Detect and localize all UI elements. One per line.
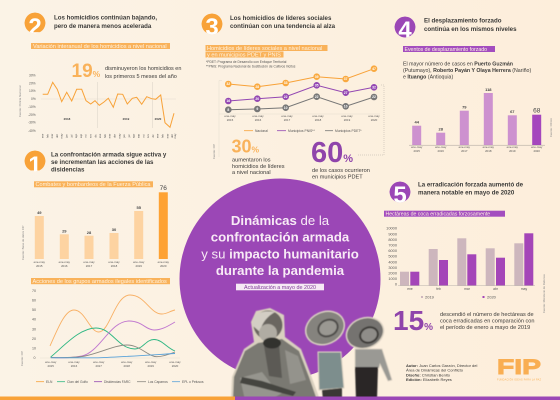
line chart: armed groups: 2020 [172,364,179,368]
line chart: social leaders: ene-may [312,114,324,118]
panel: section 2 homicides [18,12,181,139]
callout: 19 percent: los primeros 5 meses del año [105,74,177,80]
callout: 60 percent: de los casos ocurrieron [312,168,370,174]
panel: section 3 social leaders [202,14,384,180]
line chart: interannual variation: Fuente: Policía Nacional [18,85,22,117]
heading label: combats: Combates y bombardeos de la Fuerza Pública [36,182,151,188]
heading label: interannual variation: Variación interanual de los homicidios a nivel nacional [33,44,167,50]
bar chart: displacement: Fuente: OCHA [549,118,553,137]
line chart: social leaders: 16 [226,99,230,103]
line chart: armed groups: 10 [32,346,36,350]
line chart: social leaders: 47 [372,67,376,71]
icon: number 1 [24,150,46,172]
text: credits: Edición: Elizabeth Reyes [406,377,452,382]
line chart: interannual variation: feb [160,134,164,138]
bar chart: hectares: 4000 [388,259,398,264]
bar chart: combats: ene-may [34,260,45,264]
line chart: armed groups: ene-may [169,360,181,364]
line chart: interannual variation: abr [55,134,59,138]
heading: section 4: continúa en los mismos niveles [424,26,517,33]
bar chart: displacement [409,87,553,153]
line chart: interannual variation: 2019 [123,117,130,121]
callout: 60 percent: en municipios PDET [312,174,363,180]
text: footnotes: **PNIS: Programa Nacional de Sustitución de Cultivos Ilícitos [206,64,296,68]
line chart: interannual variation: -10% [28,105,36,109]
line chart: interannual variation: may [61,133,64,138]
bar chart: hectares: Fuente: Ministerio de Defensa [542,274,546,313]
line chart: interannual variation: oct [84,134,88,138]
logo: FIP: FUNDACIÓN IDEAS PARA LA PAZ [497,378,542,382]
heading: section 2: Los homicidios continúan bajando, [54,14,157,22]
line chart: interannual variation: jun [122,134,126,139]
bar chart: combats: 76 [160,185,167,192]
heading label: displacement events: Eventos de desplazamiento forzado [404,47,487,53]
illustration: second person carrying rolled mattress [342,312,392,400]
bar chart: hectares: 6000 [388,248,398,253]
callout: 60 percent: 60% [311,137,353,169]
bar chart: combats: ene-may [83,260,95,264]
line chart: interannual variation: may [174,133,177,138]
line chart: interannual variation: 10% [29,89,36,93]
callout: 19 percent: 19% [72,61,101,82]
bar chart: hectares: 5000 [388,254,398,259]
callout: 30 percent: 30% [232,137,260,157]
bar chart: displacement: 44 [414,120,420,124]
line chart: social leaders: ene-may [224,114,236,118]
bar chart: displacement: 2016 [437,149,444,153]
bar chart: combats: 2017 [86,264,93,268]
icon: number 5 [390,182,410,202]
bar chart: displacement: 2019 [509,149,516,153]
line chart: armed groups: 30 [32,327,36,331]
bar chart: combats: 30 [112,227,117,232]
line chart: social leaders: 22 [372,95,376,99]
line chart: interannual variation: ene [157,133,160,138]
line chart: interannual variation: feb [45,134,49,138]
line chart: social leaders: 28 [255,85,259,89]
line chart: interannual variation: 20% [29,81,36,85]
bar chart: hectares: may [521,287,527,291]
line chart: social leaders: ene-may [341,114,353,118]
line chart: interannual variation: abr [112,134,116,138]
bar chart: displacement: ene-may [411,145,423,149]
subtitle: update date [236,284,324,291]
bar chart: hectares: 2020 [487,294,497,299]
line chart: interannual variation: dic [93,134,97,138]
bar chart: combats: 29 [62,228,67,234]
icon: number 4 [394,16,416,38]
line chart: social leaders: 2018 [315,118,322,122]
line chart: armed groups: ene-may [68,360,80,364]
callout: 19 percent [72,61,181,82]
line chart: armed groups: 20 [32,337,36,341]
bar chart: hectares: 9000 [388,231,398,236]
bar chart: displacement: 67 [510,109,515,114]
bar chart: displacement: ene-may [531,145,543,149]
line chart: interannual variation: jul [127,134,131,138]
callout: 15 percent: coca erradicadas en comparación con [440,318,535,324]
line chart: social leaders: 2015 [227,118,234,122]
heading label: armed groups: Acciones de los grupos armados ilegales identificados [32,279,167,285]
line chart: social leaders: ene-may [252,114,264,118]
line chart: social leaders: 32 [226,82,230,86]
line chart: interannual variation: nov [90,133,92,138]
line chart: interannual variation: mar [108,134,112,138]
line chart: social leaders: 22 [284,95,288,99]
line chart: interannual variation: oct [141,134,145,138]
line chart: social leaders: ene-may [368,114,380,118]
line chart: armed groups: 40 [32,318,36,322]
line chart: armed groups: Fuente: FIP [20,351,24,366]
title: durante la pandemia [216,263,345,278]
illustration: person carrying rolled mattress [300,305,350,400]
line chart: social leaders: 27 [344,91,348,95]
bar chart: combats: 49 [37,210,42,215]
icon: number 5: 5 [393,182,407,209]
line chart: armed groups: 2018 [123,364,130,368]
line chart: social leaders: 22 [315,95,319,99]
bar chart: combats: 55 [136,205,142,210]
line chart: interannual variation: mar [50,134,54,138]
text: credits: Diseño: Christian Benito [406,372,450,377]
bar chart: hectares: 7000 [388,242,398,248]
heading label: social leaders: y en municipios PDET y PNIS [207,52,281,58]
bar chart: displacement: 68 [533,108,541,114]
heading label: hectares: Hectáreas de coca erradicadas forzosamente [386,212,490,218]
heading: section 1: disidencias [51,166,85,174]
line chart: armed groups: ene-may [145,360,157,364]
line chart: social leaders: 2017 [284,118,291,122]
line chart: social leaders: 37 [344,77,348,81]
panel: section 5 forced eradication [384,182,546,336]
line chart: interannual variation: mar [165,134,169,138]
line chart: social leaders: Fuente: FIP [212,144,216,159]
icon: number 3: 3 [205,14,219,41]
line chart: social leaders: 2019 [344,118,351,122]
line chart: armed groups: Los Caparros [148,380,168,384]
line chart: interannual variation: abr [170,134,174,138]
bar chart: combats: 2018 [111,264,118,268]
line chart: armed groups: ene-may [93,360,105,364]
line chart: social leaders: 39 [315,75,319,79]
icon: number 1: 1 [28,152,42,179]
bar chart: displacement: 2018 [485,149,492,153]
line chart: armed groups: 2015 [47,364,54,368]
bar chart: hectares: 10000 [386,226,398,231]
line chart: social leaders [212,65,380,159]
bar chart: hectares: 2019 [425,294,435,299]
heading: section 5: La erradicación forzada aumentó de [418,182,524,188]
text: displacement detail: (Putumayo), Roberto Payán Y Olaya Herrera (Nariño) [403,68,531,74]
line chart: armed groups: ene-may [121,360,133,364]
heading: section 1: La confrontación armada sigue activa y [51,152,167,158]
title: Dinámicas de la [231,213,329,228]
bar chart: displacement: ene-may [435,145,447,149]
icon: number 2 [24,12,46,34]
line chart: social leaders: 33 [284,81,288,85]
logo: FIP: FIP [497,355,541,379]
line chart: social leaders: 35 [315,84,319,88]
line chart: social leaders: Municipios PDET* [335,129,362,133]
text: footnotes: *PDET: Programa de Desarrollo con Enfoque Territorial [206,60,287,64]
heading: section 4: El desplazamiento forzado [424,18,502,24]
callout: 30 percent: aumentaron los [232,158,271,164]
bar chart: hectares: 3000 [388,265,398,270]
line chart: interannual variation: 2020 [155,117,162,121]
bar chart: combats: 2020 [160,264,167,268]
line chart: interannual variation: 30% [29,74,36,78]
line chart: interannual variation: may [118,133,121,138]
line chart: interannual variation: ago [133,133,136,138]
text: credits: Área de Dinámicas del Conflicto [406,368,464,373]
bar chart: displacement: ene-may [459,145,470,149]
heading: section 3: continúan con una tendencia al alza [230,23,336,30]
callout: 15 percent: 15% [393,305,433,336]
line chart: interannual variation: jun [64,134,68,139]
line chart: interannual variation: -20% [28,113,36,117]
bar chart: hectares: 8000 [388,237,398,242]
heading label: social leaders [206,45,328,58]
line chart: interannual variation: sep [80,133,83,138]
heading: section 3: Los homicidios de líderes sociales [230,15,332,22]
bar chart: combats: ene-may [108,260,120,264]
line chart: armed groups: 2016 [71,364,78,368]
bar chart: hectares: 1000 [388,276,398,281]
line chart: interannual variation [18,74,177,139]
logo: FIP [497,355,542,382]
bar chart: displacement: 2020 [533,149,540,153]
footer bar [0,396,560,400]
callout: 19 percent: disminuyeron los homicidios en [105,66,181,72]
icon: number 3 [202,14,222,34]
line chart: social leaders: 20 [255,97,259,101]
bar chart: combats [21,185,169,268]
line chart: armed groups: EPL o Pelusos [182,380,204,384]
icon: number 4: 4 [398,17,412,44]
line chart: social leaders: ene-may [281,114,293,118]
text: displacement detail: e Ituango (Antioquia) [403,74,453,80]
line chart: armed groups: 2019 [147,364,154,368]
title: confrontación armada [211,230,350,244]
icon: number 2: 2 [28,14,42,41]
illustration: soldier photo [231,308,320,400]
callout: 15 percent [393,305,535,336]
line chart: social leaders: 2020 [371,118,378,122]
text: displacement detail: El mayor número de casos en Puerto Guzmán [403,62,513,68]
heading: section 5: manera notable en mayo de 2020 [418,190,515,196]
line chart: interannual variation: ago [75,133,78,138]
line chart: armed groups: 50 [32,308,36,312]
bar chart: displacement: ene-may [507,145,518,149]
line chart: social leaders: Nacional [255,129,268,133]
line chart: interannual variation: feb [103,134,107,138]
bar chart: hectares: mar [464,287,471,291]
line chart: interannual variation: sep [138,133,140,138]
callout: 15 percent: el período de enero a mayo de 2019 [440,325,530,331]
bar chart: combats: ene-may [158,260,169,264]
bar chart: combats: Fuente: Base de datos FIP [21,226,25,260]
bar chart: hectares [386,226,546,313]
callout: 30 percent: a nivel nacional [232,170,271,176]
callout: 60 percent [311,137,370,180]
line chart: social leaders: 10 [284,106,288,110]
line chart: armed groups: Disidencias FARC [104,380,131,384]
bar chart: combats: 2016 [61,264,68,268]
bar chart: displacement: 79 [462,104,467,110]
line chart: armed groups: ELN [46,380,53,384]
line chart: social leaders: 9 [256,107,258,111]
heading label: social leaders: Homicidios de líderes sociales a nivel nacional [207,46,322,52]
bar chart: combats: ene-may [133,260,145,264]
line chart: interannual variation: jul [69,134,73,138]
bar chart: displacement: 2017 [461,149,468,153]
line chart: armed groups: 70 [32,289,36,293]
line chart: social leaders: Municipios PNIS** [288,129,315,133]
bar chart: hectares: abr [493,287,499,291]
line chart: social leaders: 32 [372,86,376,90]
line chart: social leaders: 8 [227,108,229,112]
title: y su impacto humanitario [201,246,359,262]
line chart: social leaders: 2016 [255,118,262,122]
bar chart: displacement: 2015 [413,149,420,153]
line chart: social leaders: 10 [344,104,348,108]
subtitle: update date: Actualización a mayo de 2020 [244,285,316,291]
line chart: armed groups: 0 [34,356,36,360]
line chart: interannual variation: 2018 [64,117,71,121]
line chart: interannual variation: ene [99,133,102,138]
heading: section 1: se incrementan las acciones de las [51,159,154,166]
bar chart: combats: 2019 [135,264,142,268]
callout: 15 percent: descendió el número de hectáreas de [440,312,534,318]
line chart: armed groups: ene-may [45,360,57,364]
heading: section 2: pero de manera menos acelerada [54,23,152,30]
bar chart: hectares: feb [436,287,441,291]
bar chart: displacement: 28 [438,126,444,132]
line chart: interannual variation: 0% [31,97,36,101]
callout: 30 percent [232,137,285,176]
arrow: bracket from 60 percent to chart [358,85,384,155]
panel: section 4 displacement [394,16,553,153]
line chart: interannual variation: dic [151,134,155,138]
text: credits: Autor: Juan Carlos Garzón, Director del [406,363,477,368]
bar chart: combats: 28 [87,230,92,235]
bar chart: hectares: ene [407,287,413,291]
line chart: armed groups: 60 [32,299,36,303]
line chart: interannual variation: nov [147,133,150,138]
line chart: armed groups: 2017 [95,364,102,368]
line chart: interannual variation: -30% [28,120,36,124]
line chart: interannual variation: -40% [28,129,36,133]
line chart: armed groups [20,289,204,384]
line chart: interannual variation: ene [42,133,44,138]
panel: section 1 armed confrontation [20,150,204,384]
line chart: armed groups: Clan del Golfo [67,380,88,384]
bar chart: displacement: 118 [485,87,492,92]
bar chart: hectares: 0 [395,282,398,287]
bar chart: hectares: 2000 [388,270,398,276]
bar chart: combats: ene-may [59,260,70,264]
bar chart: combats: 2015 [36,264,43,268]
callout: 30 percent: homicidios de líderes [232,164,285,170]
panel: main purple circle [180,178,380,380]
bar chart: displacement: ene-may [483,145,494,149]
